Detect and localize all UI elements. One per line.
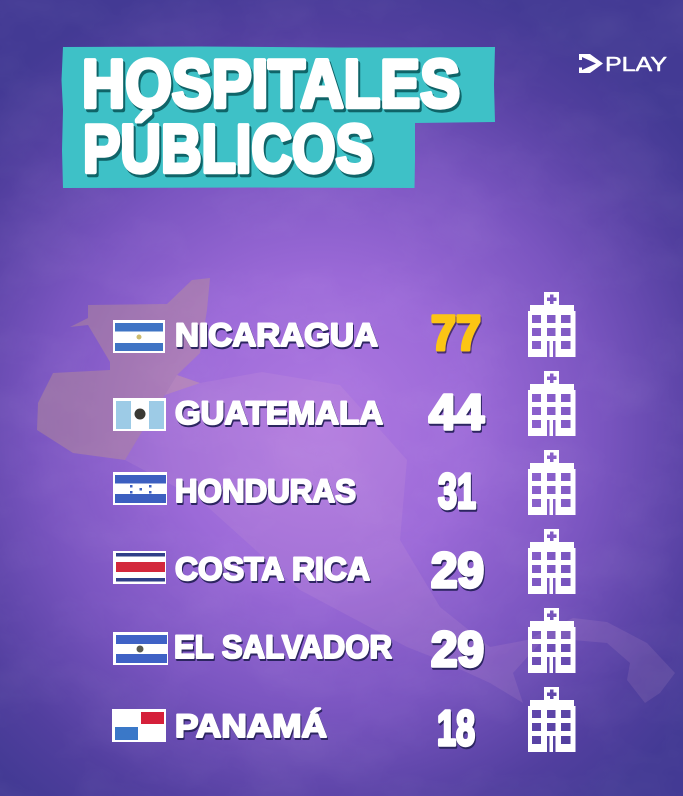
icon: hospital	[528, 292, 576, 357]
row: Panamá	[112, 687, 576, 756]
row: Nicaragua	[113, 292, 576, 361]
flag: Guatemala	[113, 398, 166, 431]
label: Honduras: HONDURAS	[175, 473, 356, 509]
flag: Costa Rica	[113, 551, 166, 584]
icon: hospital	[528, 687, 576, 752]
flag: Nicaragua	[113, 320, 165, 353]
map of Central America silhouette	[37, 278, 675, 703]
flag: Honduras	[113, 472, 167, 505]
row: Honduras	[113, 450, 576, 519]
label: Panamá: PANAMÁ	[175, 708, 327, 744]
title text: PÚBLICOS	[83, 111, 373, 187]
title text: HOSPITALES	[82, 46, 460, 122]
icon: hospital	[528, 450, 576, 515]
row: Guatemala	[113, 371, 576, 440]
title text	[82, 46, 460, 187]
value: 29: 29	[431, 544, 484, 598]
icon: hospital	[528, 371, 576, 436]
title background panel	[62, 46, 495, 188]
label: Guatemala: GUATEMALA	[175, 395, 383, 431]
flag: Panamá	[112, 709, 166, 742]
label: El Salvador: EL SALVADOR	[174, 629, 392, 665]
row: Costa Rica	[113, 529, 576, 598]
row: El Salvador	[113, 608, 576, 677]
value: 31: 31	[438, 465, 476, 519]
value: 29: 29	[431, 623, 484, 677]
flag: El Salvador	[113, 632, 168, 665]
value: 44: 44	[429, 386, 484, 440]
label: Costa Rica: COSTA RICA	[175, 551, 370, 587]
value: 77: 77	[431, 307, 481, 361]
title banner	[62, 46, 495, 188]
label: Nicaragua: NICARAGUA	[175, 317, 378, 353]
logo: D PLAY	[579, 54, 667, 76]
icon: hospital	[528, 529, 576, 594]
value: 18: 18	[437, 702, 475, 756]
logo: D PLAY: PLAY	[605, 54, 667, 76]
icon: hospital	[528, 608, 576, 673]
